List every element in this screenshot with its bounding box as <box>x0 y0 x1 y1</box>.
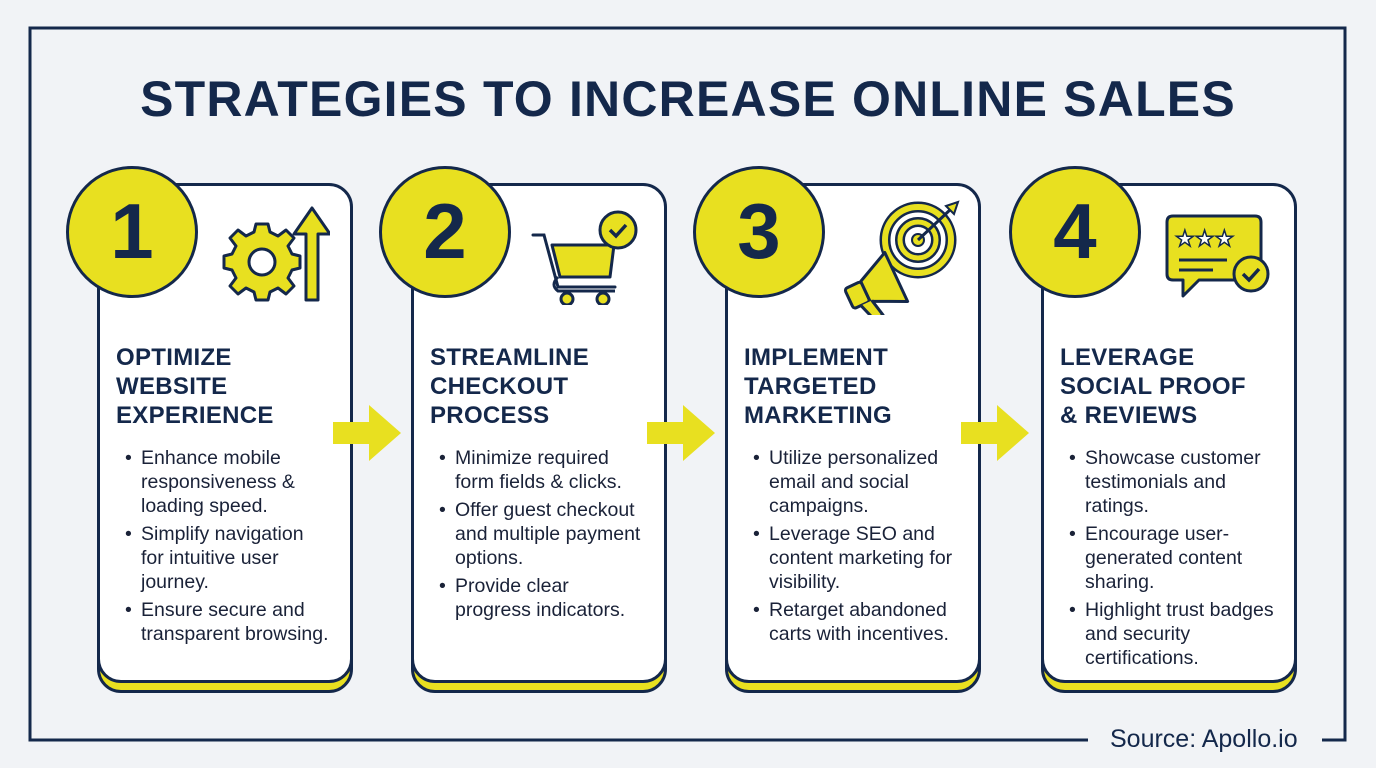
panel: card 4 <box>1041 183 1297 693</box>
bullets: card 2: form fields & clicks. <box>455 471 622 493</box>
number circle 4 <box>1009 166 1141 298</box>
panel: card 2 <box>411 183 667 693</box>
panel: card 3 <box>725 183 981 693</box>
heading: card 2 <box>430 344 589 429</box>
bullets: card 1 <box>126 447 329 645</box>
bullets: card 4: Showcase customer <box>1085 447 1261 469</box>
bullets: card 4: generated content <box>1085 547 1242 569</box>
bullets: card 3: visibility. <box>769 571 840 593</box>
bullets: card 4: Highlight trust badges <box>1085 599 1274 621</box>
bullets: card 1: Simplify navigation <box>141 523 304 545</box>
heading: card 2: STREAMLINE <box>430 344 589 371</box>
bullets: card 3: Retarget abandoned <box>769 599 947 621</box>
bullets: card 2: progress indicators. <box>455 599 625 621</box>
source: Source: Apollo.io <box>1110 725 1298 753</box>
heading: card 3: MARKETING <box>744 402 892 429</box>
bullets: card 3: content marketing for <box>769 547 952 569</box>
heading: card 4: SOCIAL PROOF <box>1060 373 1246 400</box>
bullets: card 3: Utilize personalized <box>769 447 938 469</box>
icon: megaphone and target <box>844 200 960 315</box>
icon: shopping cart with check <box>532 210 638 305</box>
bullets: card 1: Ensure secure and <box>141 599 305 621</box>
bullets: card 1: journey. <box>141 571 209 593</box>
arrow 3 <box>961 405 1029 461</box>
icon: review bubble <box>1166 214 1270 298</box>
bullets: card 3: Leverage SEO and <box>769 523 935 545</box>
heading: card 1: OPTIMIZE <box>116 344 232 371</box>
arrow 2 <box>647 405 715 461</box>
bullets: card 3: email and social <box>769 471 909 493</box>
heading: card 1 <box>116 344 274 429</box>
number circle 3 <box>693 166 825 298</box>
bullets: card 4: certifications. <box>1085 647 1199 669</box>
heading: card 1: WEBSITE <box>116 373 227 400</box>
bullets: card 1: loading speed. <box>141 495 268 517</box>
bullets: card 2: Minimize required <box>455 447 609 469</box>
bullets: card 1: transparent browsing. <box>141 623 329 645</box>
heading: card 4: & REVIEWS <box>1060 402 1197 429</box>
bullets: card 2: Offer guest checkout <box>455 499 635 521</box>
number circle 2 <box>379 166 511 298</box>
bullets: card 4: Encourage user- <box>1085 523 1229 545</box>
bullets: card 3 <box>754 447 952 645</box>
number circle 1: 1 <box>110 187 154 275</box>
number circle 4: 4 <box>1053 187 1097 275</box>
bullets: card 3: carts with incentives. <box>769 623 949 645</box>
bullets: card 2: and multiple payment <box>455 523 640 545</box>
bullets: card 4: ratings. <box>1085 495 1149 517</box>
number circle 3: 3 <box>737 187 781 275</box>
bullets: card 2: options. <box>455 547 523 569</box>
bullets: card 4: testimonials and <box>1085 471 1226 493</box>
icon: gear with arrow <box>222 206 330 302</box>
bullets: card 4: and security <box>1085 623 1190 645</box>
heading: card 4 <box>1060 344 1246 429</box>
bullets: card 1: responsiveness & <box>141 471 295 493</box>
heading: card 3 <box>744 344 892 429</box>
bullets: card 2 <box>440 447 640 621</box>
heading: card 3: TARGETED <box>744 373 877 400</box>
heading: card 2: PROCESS <box>430 402 549 429</box>
bullets: card 4 <box>1070 447 1274 669</box>
icon: review bubble: ★★★ <box>1175 226 1234 251</box>
heading: card 4: LEVERAGE <box>1060 344 1194 371</box>
panel: card 1 <box>97 183 353 693</box>
title: STRATEGIES TO INCREASE ONLINE SALES <box>140 71 1236 127</box>
bullets: card 3: campaigns. <box>769 495 869 517</box>
heading: card 1: EXPERIENCE <box>116 402 274 429</box>
number circle 1 <box>66 166 198 298</box>
heading: card 2: CHECKOUT <box>430 373 568 400</box>
heading: card 3: IMPLEMENT <box>744 344 888 371</box>
bullets: card 1: for intuitive user <box>141 547 279 569</box>
bullets: card 1: Enhance mobile <box>141 447 281 469</box>
arrow 1 <box>333 405 401 461</box>
bullets: card 2: Provide clear <box>455 575 569 597</box>
number circle 2: 2 <box>423 187 467 275</box>
bullets: card 4: sharing. <box>1085 571 1154 593</box>
